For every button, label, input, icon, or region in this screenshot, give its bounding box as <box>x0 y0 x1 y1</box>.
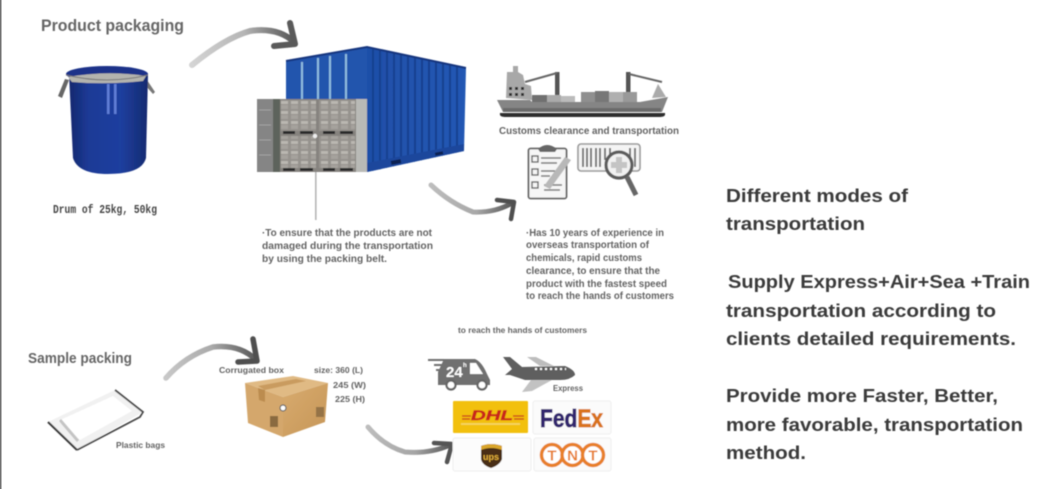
logo: TNT: T <box>588 448 598 464</box>
text block: customs experience: ·Has 10 years of experience in <box>526 228 664 239</box>
logo: TNT: N <box>567 448 578 464</box>
icon: 24h delivery truck <box>428 359 490 390</box>
text block: customs experience: chemicals, rapid customs <box>526 253 643 264</box>
arrow: drum to container <box>192 23 295 65</box>
label: plastic bags: Plastic bags <box>116 440 165 450</box>
icon: corrugated box <box>245 376 328 437</box>
logo: DHL <box>453 401 528 433</box>
logo: UPS: ups <box>483 452 499 462</box>
text block: customs experience: overseas transportation of <box>526 240 650 251</box>
caption: reach customers: to reach the hands of customers <box>458 325 587 335</box>
text block: packing belt note: by using the packing belt. <box>262 254 387 265</box>
left edge line <box>0 0 2 489</box>
heading: sample packing: Sample packing <box>28 350 132 367</box>
icon: shipping container with pallets <box>257 45 466 220</box>
text block: packing belt note: damaged during the transportation <box>262 241 433 252</box>
text block: transportation modes: Different modes of <box>726 185 909 206</box>
text block: transportation modes <box>726 185 1030 463</box>
text block: customs experience: to reach the hands of customers <box>526 291 675 302</box>
label: box dimensions <box>314 365 366 404</box>
arrow: container to customs <box>431 185 514 219</box>
text block: transportation modes: Supply Express+Air+Sea +Train <box>728 271 1030 292</box>
text block: packing belt note: ·To ensure that the products are not <box>262 228 433 239</box>
text block: customs experience: product with the fastest speed <box>526 279 667 290</box>
arrow: bag to box <box>166 339 257 378</box>
icon: plastic bag <box>48 390 143 450</box>
text block: transportation modes: transportation according to <box>726 300 996 321</box>
text block: customs experience <box>526 228 675 302</box>
text block: transportation modes: clients detailed requirements. <box>726 328 1016 349</box>
text block: transportation modes: more favorable, transportation <box>726 414 1023 435</box>
text block: packing belt note <box>262 228 433 265</box>
text block: transportation modes: transportation <box>726 213 865 234</box>
icon: 24h delivery truck: 24 <box>446 364 463 381</box>
text block: transportation modes: method. <box>726 442 806 463</box>
logo: TNT <box>534 438 611 471</box>
logo: FedEx: FedEx <box>540 405 603 433</box>
label: drum sizes: Drum of 25kg, 50kg <box>53 204 157 217</box>
heading: product packaging: Product packaging <box>41 17 184 35</box>
arrow: box to couriers <box>368 427 452 462</box>
heading: customs clearance: Customs clearance and transportation <box>499 126 679 137</box>
icon: cargo ship <box>497 66 668 117</box>
label: box dimensions: size: 360 (L) <box>314 365 363 375</box>
icon: blue drum <box>58 66 155 174</box>
icon: 24h delivery truck: h <box>463 363 467 369</box>
logo: UPS <box>453 438 531 471</box>
logo: DHL: DHL <box>471 407 513 423</box>
text block: transportation modes: Provide more Faster, Better, <box>726 385 998 406</box>
logo: TNT: T <box>547 448 557 464</box>
text block: customs experience: clearance, to ensure that the <box>526 266 661 277</box>
icon: clipboard checklist <box>528 145 571 198</box>
label: box dimensions: 245 (W) <box>333 380 366 390</box>
label: express: Express <box>553 383 583 393</box>
icon: barcode with magnifier <box>578 144 640 195</box>
icon: airplane <box>503 357 575 392</box>
label: box dimensions: 225 (H) <box>335 394 365 404</box>
label: corrugated box: Corrugated box <box>219 365 284 375</box>
